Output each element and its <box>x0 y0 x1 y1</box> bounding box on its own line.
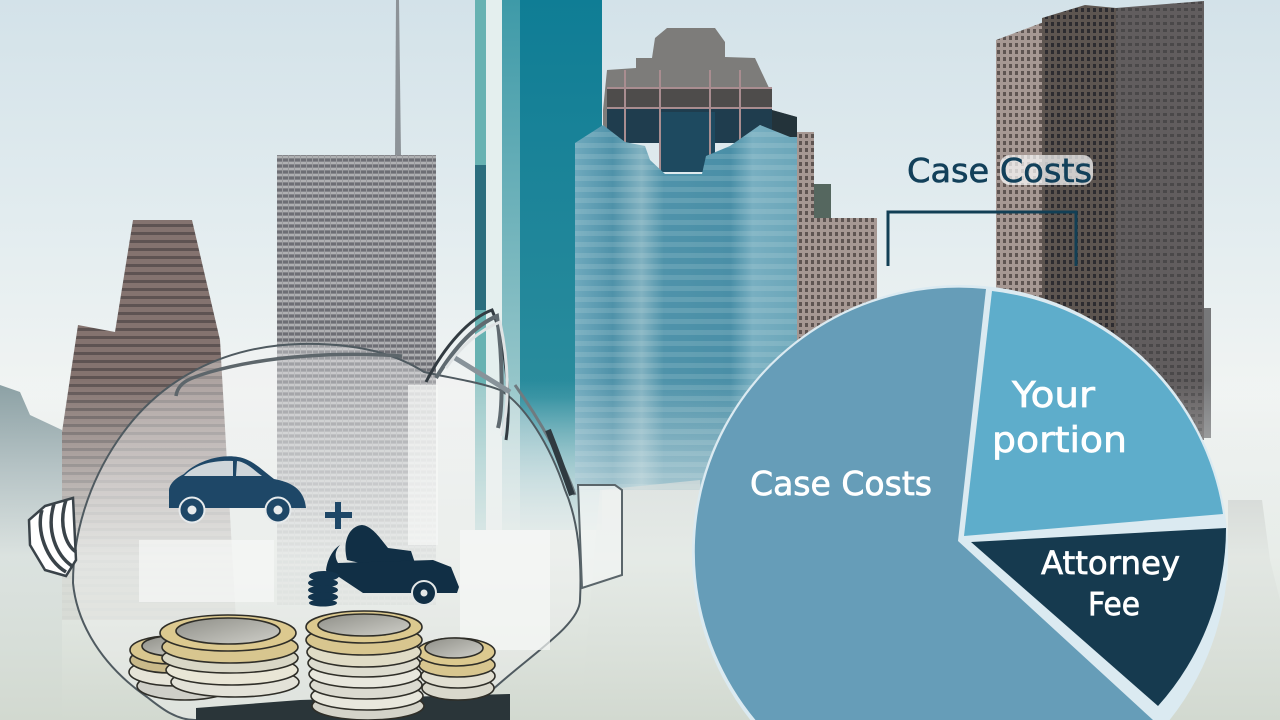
left coin stack <box>129 636 233 700</box>
slice: your portion <box>964 291 1223 536</box>
right tall building centre <box>1042 5 1116 340</box>
short brown building <box>814 218 877 328</box>
label: attorney fee: Fee <box>1088 585 1140 623</box>
label: your portion: Your <box>1011 375 1095 416</box>
heading glow behind garbled word <box>1000 155 1093 185</box>
label: case costs: Case Costs <box>750 464 932 503</box>
coin slot <box>176 354 402 396</box>
pie chart <box>692 285 1228 720</box>
icon: mechanic and damaged car <box>326 525 459 605</box>
crown of glass tower <box>603 28 797 172</box>
glass tower banding <box>575 125 797 490</box>
far left building <box>0 385 62 720</box>
teal skyscraper <box>475 0 602 530</box>
faded lower right buildings <box>1170 500 1280 720</box>
icon: small coin stack <box>308 571 339 606</box>
icon: plus sign <box>325 502 352 529</box>
bracket connector <box>888 212 1076 266</box>
ear <box>426 310 575 495</box>
curly tail <box>29 498 76 576</box>
grey office block <box>277 155 436 605</box>
right tall building left wing <box>996 22 1044 340</box>
centre coin stack <box>306 611 424 720</box>
side building <box>797 132 814 342</box>
spire <box>395 0 401 155</box>
slice: attorney fee <box>971 528 1226 706</box>
right tall building shaded side <box>1116 1 1204 440</box>
pie backing ring <box>692 285 1228 720</box>
rooftop equipment <box>814 184 831 218</box>
glass body <box>73 344 580 720</box>
piggy bank <box>29 310 622 720</box>
snout <box>578 485 622 588</box>
background seen through glass <box>139 385 550 650</box>
glass tower <box>575 125 797 490</box>
dark base under coins <box>196 694 510 720</box>
label: attorney fee: Attorney <box>1041 544 1180 582</box>
slice: case costs <box>695 288 1153 720</box>
icon: blue car <box>169 456 306 522</box>
label: your portion: portion <box>992 420 1127 461</box>
right annex <box>1204 308 1211 438</box>
coin stacks <box>129 611 495 720</box>
stepped brown tower <box>62 220 236 620</box>
faded lower centre buildings <box>580 480 700 720</box>
morning mist overlay <box>0 380 1280 720</box>
heading: case costs: Case Costs <box>907 151 1092 190</box>
middle left coin stack <box>160 615 299 697</box>
right coin stack <box>417 638 495 700</box>
